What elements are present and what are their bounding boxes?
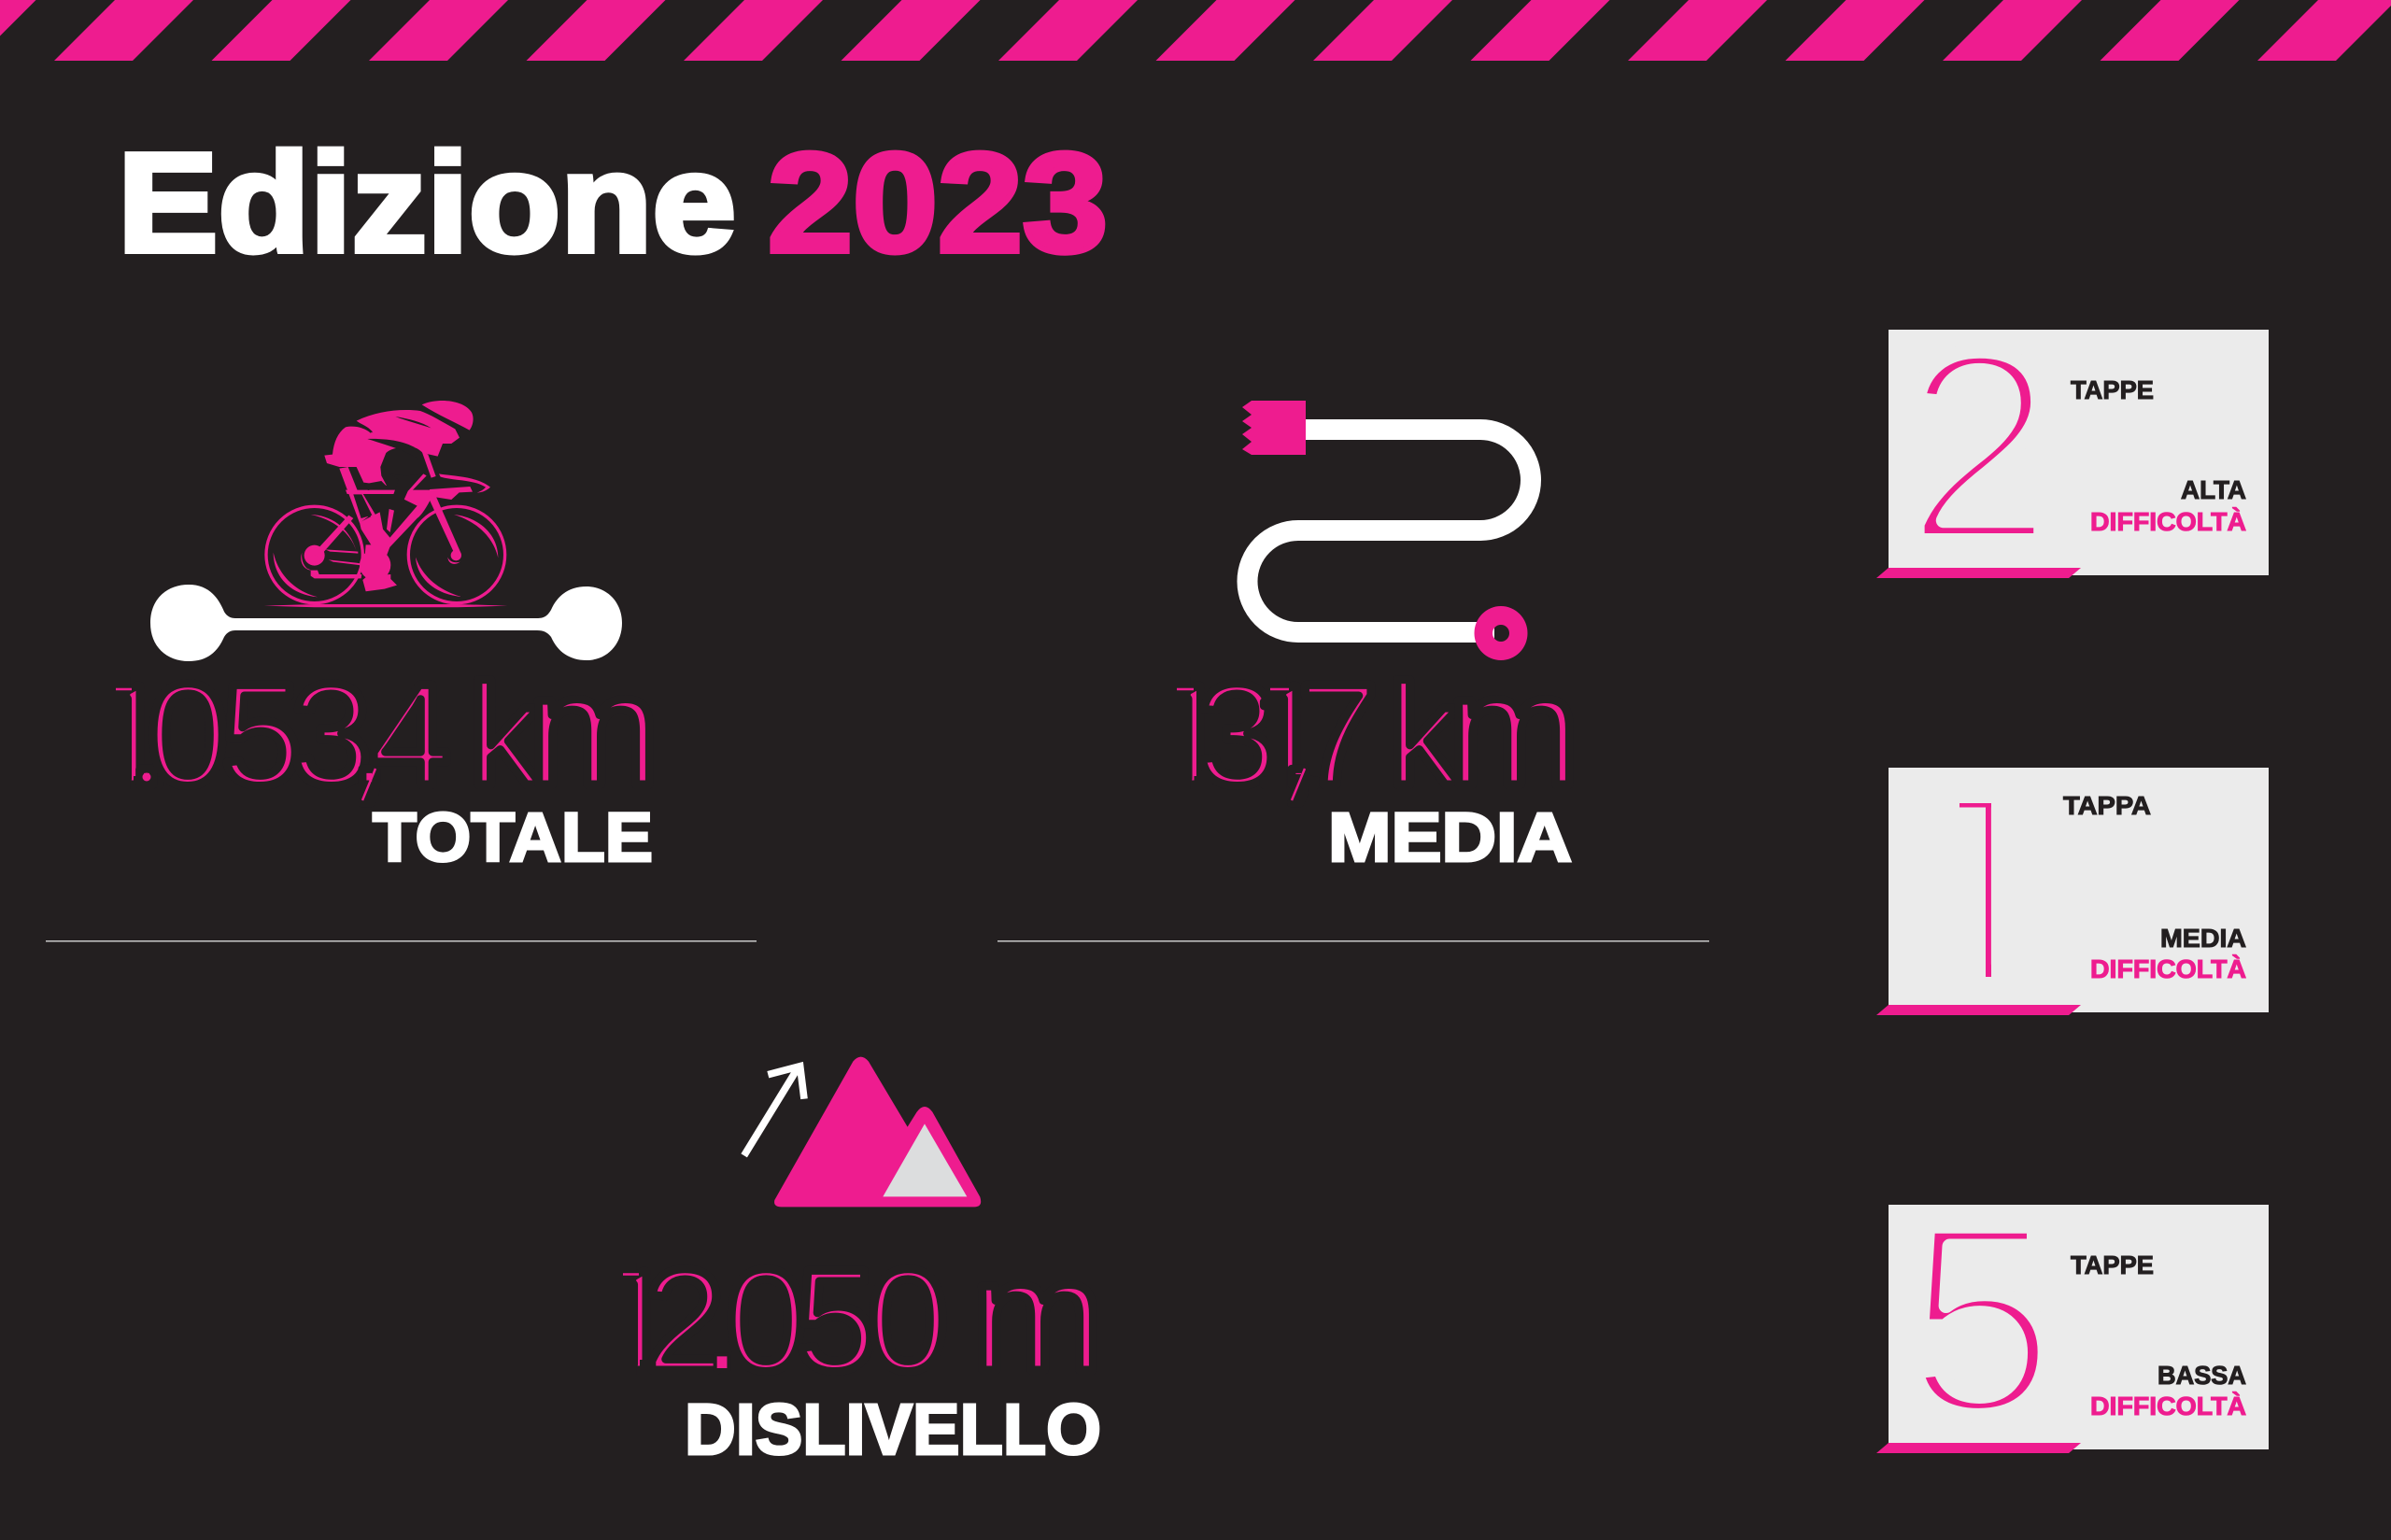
value: average km: m: [1448, 642, 1580, 819]
value: total km: [89, 642, 660, 819]
card: low difficulty: BASSA: [2158, 1361, 2246, 1390]
panel: average distance: [1149, 401, 1580, 876]
icon: mountains with arrow: [744, 1057, 981, 1207]
value: elevation metres: [594, 1227, 1104, 1405]
panel: total distance: [89, 401, 660, 876]
number 2: 2: [1903, 295, 2055, 599]
card: low difficulty: TAPPE: [2071, 1250, 2154, 1279]
card: high difficulty: ALTA: [2181, 475, 2246, 504]
top diagonal stripe band: [0, 0, 2391, 61]
card: medium difficulty: MEDIA: [2160, 924, 2246, 953]
panel: elevation gain: [594, 1057, 1104, 1470]
card: low difficulty: [1876, 1167, 2269, 1471]
value: average km: 3: [1197, 654, 1278, 815]
value: average km: ,7 k: [1278, 654, 1461, 815]
title: 2023: [768, 123, 1108, 281]
icon: winding route: [1242, 401, 1531, 660]
title: [118, 123, 1108, 281]
icon: road with end points: [150, 585, 622, 661]
card: medium difficulty: DIFFICOLTÀ: [2090, 954, 2246, 983]
value: total km: 1: [94, 651, 169, 817]
value: elevation metres: 2: [644, 1239, 725, 1401]
handlebar: [430, 487, 473, 500]
number 5: 5: [1905, 1167, 2057, 1471]
shoe and lower leg: [360, 512, 390, 546]
body: [357, 410, 460, 457]
card: high difficulty: [1876, 295, 2269, 599]
value: average km: [1149, 642, 1580, 819]
icon: cyclist: [264, 401, 507, 607]
frame: [339, 467, 368, 523]
value: average km: 1: [1251, 651, 1325, 817]
value: elevation metres: 050: [726, 1239, 983, 1401]
card: medium difficulty: [1876, 739, 2269, 1042]
dark cuts: [353, 404, 460, 518]
label: dislivello: DISLIVELLO: [685, 1390, 1101, 1470]
card: low difficulty: DIFFICOLTÀ: [2090, 1392, 2246, 1420]
card: high difficulty: DIFFICOLTÀ: [2090, 507, 2246, 536]
crank and foot: [360, 549, 390, 581]
card: medium difficulty: TAPPA: [2063, 791, 2151, 820]
value: total km: .053,4 k: [127, 654, 542, 815]
title: Edizione: [118, 123, 736, 281]
label: totale: TOTALE: [373, 798, 653, 876]
number 1: 1: [1906, 739, 2058, 1042]
value: elevation metres: .: [702, 1239, 743, 1401]
card: high difficulty: TAPPE: [2071, 375, 2154, 404]
value: elevation metres: m: [971, 1227, 1104, 1405]
value: total km: m: [528, 642, 660, 819]
value: elevation metres: 1: [601, 1236, 675, 1403]
label: media: MEDIA: [1328, 798, 1572, 876]
value: average km: 1: [1154, 651, 1229, 817]
